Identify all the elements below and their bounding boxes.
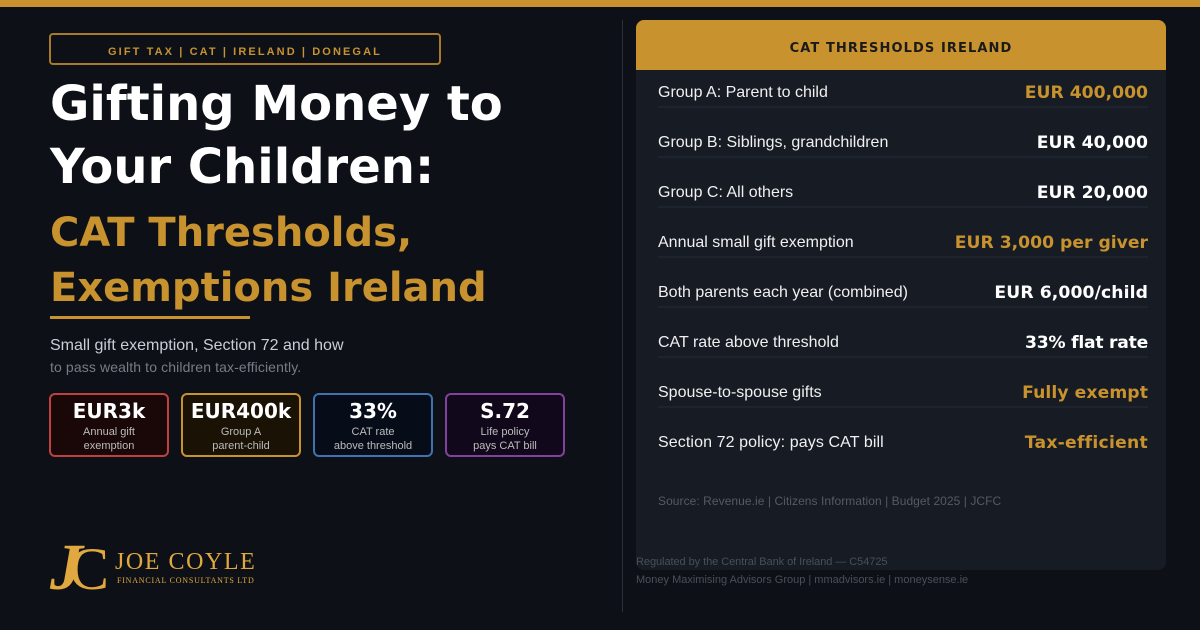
panel header: CAT THRESHOLDS IRELAND <box>790 41 1012 56</box>
advisors line: Money Maximising Advisors Group | mmadvisors.ie | moneysense.ie <box>636 574 968 586</box>
subtitle in gold <box>50 210 487 311</box>
stat: section 72: pays CAT bill <box>473 440 537 452</box>
stat: group A: Group A <box>221 426 261 438</box>
title <box>50 76 503 195</box>
subtitle in gold: Exemptions Ireland <box>50 265 487 311</box>
subtitle in gold: CAT Thresholds, <box>50 210 412 256</box>
row: small gift: Annual small gift exemption <box>658 234 854 251</box>
row: both parents: Both parents each year (combined) <box>658 284 908 301</box>
stat: CAT rate <box>313 393 433 457</box>
regulatory line: Regulated by the Central Bank of Ireland — C54725 <box>636 556 887 568</box>
row: Group A: Group A: Parent to child <box>658 84 828 101</box>
row: Group C: EUR 20,000 <box>1037 183 1148 203</box>
row: Group A: EUR 400,000 <box>1025 83 1148 103</box>
stat: annual gift: Annual gift <box>83 426 135 438</box>
stat: CAT rate: above threshold <box>334 440 412 452</box>
row: small gift: EUR 3,000 per giver <box>955 233 1148 253</box>
row: both parents <box>658 270 1148 308</box>
panel: CAT thresholds <box>636 20 1166 570</box>
row: CAT rate: CAT rate above threshold <box>658 334 839 351</box>
logo name: JOE COYLE <box>115 549 256 575</box>
row: Group B <box>658 120 1148 158</box>
tag badge: GIFT TAX | CAT | IRELAND | DONEGAL <box>108 46 382 58</box>
row: CAT rate: 33% flat rate <box>1025 333 1148 353</box>
row: Group C <box>658 170 1148 208</box>
source note: Source: Revenue.ie | Citizens Information | Budget 2025 | JCFC <box>658 494 1001 508</box>
row: section 72 <box>658 433 1148 453</box>
logo tagline: FINANCIAL CONSULTANTS LTD <box>117 576 255 585</box>
top accent bar <box>0 0 1200 7</box>
row: Group C: Group C: All others <box>658 184 793 201</box>
stat: section 72: S.72 <box>480 399 530 423</box>
vertical divider <box>622 20 623 612</box>
tag badge <box>49 33 441 65</box>
logo <box>50 531 256 604</box>
stat: annual gift <box>49 393 169 457</box>
stat: annual gift: EUR3k <box>73 399 145 423</box>
stat: CAT rate: 33% <box>349 399 397 423</box>
stat: section 72 <box>445 393 565 457</box>
logo monogram C: C <box>69 536 109 602</box>
stat: annual gift: exemption <box>84 440 134 452</box>
gold underline <box>50 316 250 319</box>
row: both parents: EUR 6,000/child <box>994 283 1148 303</box>
row: Group B: EUR 40,000 <box>1037 133 1148 153</box>
stat: CAT rate: CAT rate <box>352 426 394 438</box>
title: Gifting Money to <box>50 76 503 132</box>
stat: group A <box>181 393 301 457</box>
row: small gift <box>658 220 1148 258</box>
panel header <box>636 20 1166 70</box>
row: CAT rate <box>658 320 1148 358</box>
stat: group A: EUR400k <box>191 399 291 423</box>
description second line: to pass wealth to children tax-efficiently. <box>50 359 301 375</box>
row: Group A <box>658 70 1148 108</box>
stat: group A: parent-child <box>212 440 270 452</box>
row: section 72: Section 72 policy: pays CAT bill <box>658 434 884 451</box>
row: spouse: Spouse-to-spouse gifts <box>658 384 822 401</box>
title: Your Children: <box>50 139 434 195</box>
stat: section 72: Life policy <box>481 426 529 438</box>
row: spouse: Fully exempt <box>1022 383 1148 403</box>
description text: Small gift exemption, Section 72 and how <box>50 337 344 354</box>
logo monogram J: J <box>50 531 83 604</box>
row: section 72: Tax-efficient <box>1025 433 1148 453</box>
row: Group B: Group B: Siblings, grandchildren <box>658 134 888 151</box>
row: spouse <box>658 370 1148 408</box>
